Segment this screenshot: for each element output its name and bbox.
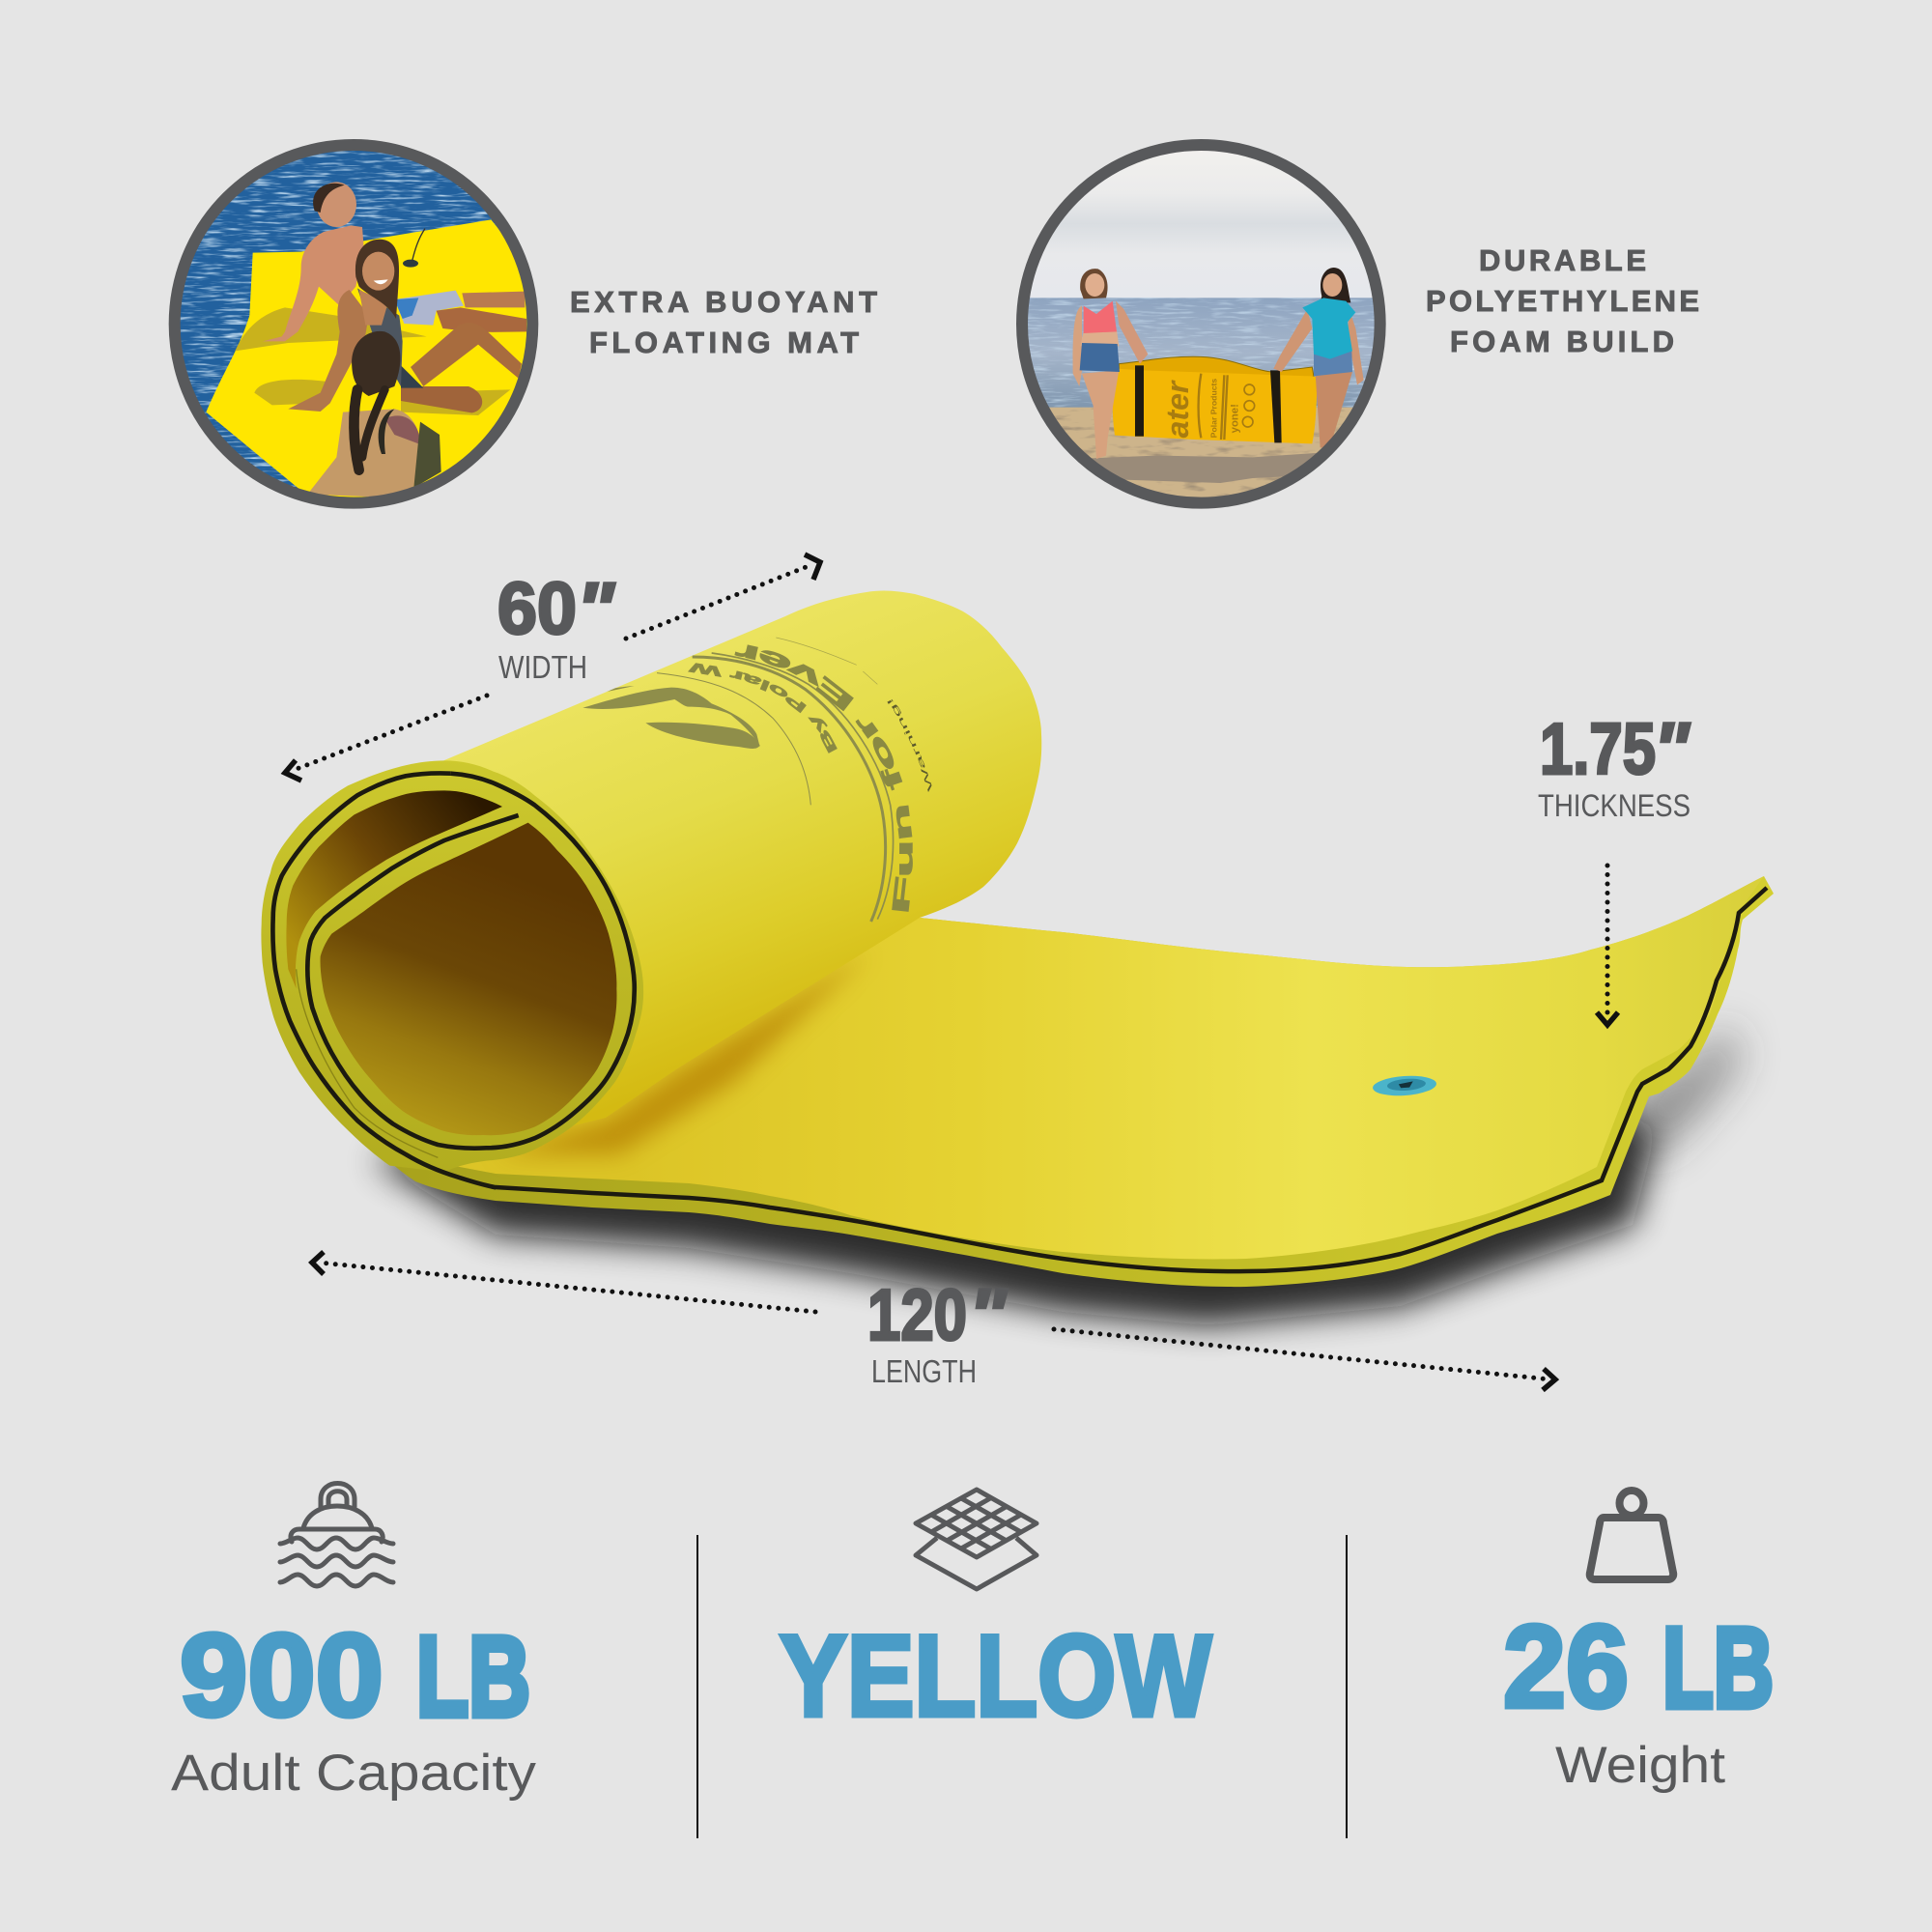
dimension label: 120 inch length xyxy=(867,1272,1008,1389)
value: 26 LB xyxy=(1503,1601,1774,1732)
right woman xyxy=(1273,268,1364,447)
photo: two women carrying rolled mat on beach xyxy=(1022,145,1381,504)
divider xyxy=(1346,1535,1348,1838)
dimension label: 60 inch width: " xyxy=(576,566,615,651)
flat mat side edge xyxy=(367,876,1774,1287)
dimension label: 1.75 inch thickness xyxy=(1538,706,1690,823)
roll end face xyxy=(261,760,643,1187)
teal anchor button xyxy=(1372,1074,1437,1097)
printed stripes xyxy=(657,638,894,922)
yellow mat xyxy=(206,219,543,502)
roll body xyxy=(290,591,1041,1159)
value: 900 LB: LB xyxy=(416,1613,530,1741)
roll shadow on flat mat xyxy=(493,952,869,1154)
black core line, inner wrap xyxy=(307,774,635,1149)
dimension label: 60 inch width: WIDTH xyxy=(498,649,587,685)
printed graphics on roll xyxy=(583,638,931,922)
dimension: thickness arrow xyxy=(1597,866,1618,1025)
dimension: width arrow xyxy=(285,554,820,781)
value: 900 LB: 900 xyxy=(180,1609,384,1741)
icon: buoy in water xyxy=(280,1484,393,1586)
man xyxy=(263,182,526,341)
icon: weight xyxy=(1590,1491,1673,1579)
label: durable polyethylene foam build: DURABLE xyxy=(1479,243,1646,277)
ground shadow xyxy=(372,1024,1739,1325)
woman in grey swimsuit xyxy=(288,240,522,412)
printed warning: Warning! xyxy=(887,699,931,792)
dimension label: 120 inch length: 120 xyxy=(867,1274,967,1355)
dimension label: 1.75 inch thickness: " xyxy=(1653,706,1690,791)
rolled yellow mat product xyxy=(261,591,1774,1362)
dimension label: 60 inch width: 60 xyxy=(497,568,577,650)
value: 26 LB: LB xyxy=(1662,1605,1774,1732)
water xyxy=(180,151,498,497)
wrap seam xyxy=(297,969,438,1157)
printed brand line: By Polar W xyxy=(688,663,838,753)
sky xyxy=(1055,151,1347,232)
black core line of flat mat xyxy=(496,888,1767,1271)
value: 900 LB xyxy=(180,1609,530,1741)
rolled mat xyxy=(1113,356,1317,443)
flat mat top surface xyxy=(444,876,1764,1259)
printed slogan: Fun for Ever xyxy=(734,644,913,912)
black core line, outer wrap xyxy=(272,773,496,1187)
label: durable polyethylene foam build xyxy=(1426,243,1699,358)
value: 26 LB: 26 xyxy=(1503,1601,1629,1732)
upper hollow xyxy=(286,790,502,988)
dimension label: 60 inch width xyxy=(497,566,615,685)
rolled mat: yone! xyxy=(1230,404,1241,433)
label: extra buoyant: EXTRA BUOYANT xyxy=(570,285,877,319)
dimension label: 120 inch length: LENGTH xyxy=(871,1353,977,1389)
value: YELLOW: YELLOW xyxy=(780,1611,1212,1741)
dimension label: 1.75 inch thickness: 1.75 xyxy=(1540,708,1656,789)
icon: mesh foam layers xyxy=(916,1490,1037,1589)
rim xyxy=(261,760,643,1172)
label: durable polyethylene foam build: FOAM BUILD xyxy=(1450,325,1674,358)
infographic canvas xyxy=(168,139,1774,1838)
caption: Adult Capacity: Adult Capacity xyxy=(171,1745,537,1802)
photo ring xyxy=(175,145,532,503)
dimension label: 1.75 inch thickness: THICKNESS xyxy=(1538,788,1690,823)
tether disc xyxy=(403,229,425,268)
label: extra buoyant xyxy=(570,285,877,359)
left woman xyxy=(1073,269,1148,459)
sea xyxy=(1027,298,1381,409)
woman with braids xyxy=(307,331,441,497)
photo ring xyxy=(1022,145,1380,503)
dimension label: 120 inch length: " xyxy=(968,1272,1008,1357)
dimension: length arrow xyxy=(312,1252,1555,1390)
sand xyxy=(1049,408,1352,497)
mat wet patches and shadows xyxy=(235,307,510,415)
rolled mat: ater xyxy=(1160,380,1195,438)
caption: Weight: Weight xyxy=(1555,1737,1725,1794)
photo: people relaxing on floating mat xyxy=(175,145,543,503)
inner hollow xyxy=(321,823,616,1135)
logo marks xyxy=(583,686,760,749)
label: durable polyethylene foam build: POLYETHYLENE xyxy=(1426,284,1699,318)
rolled mat: Polar Products xyxy=(1208,379,1218,438)
label: extra buoyant: FLOATING MAT xyxy=(589,326,859,359)
divider xyxy=(696,1535,698,1838)
